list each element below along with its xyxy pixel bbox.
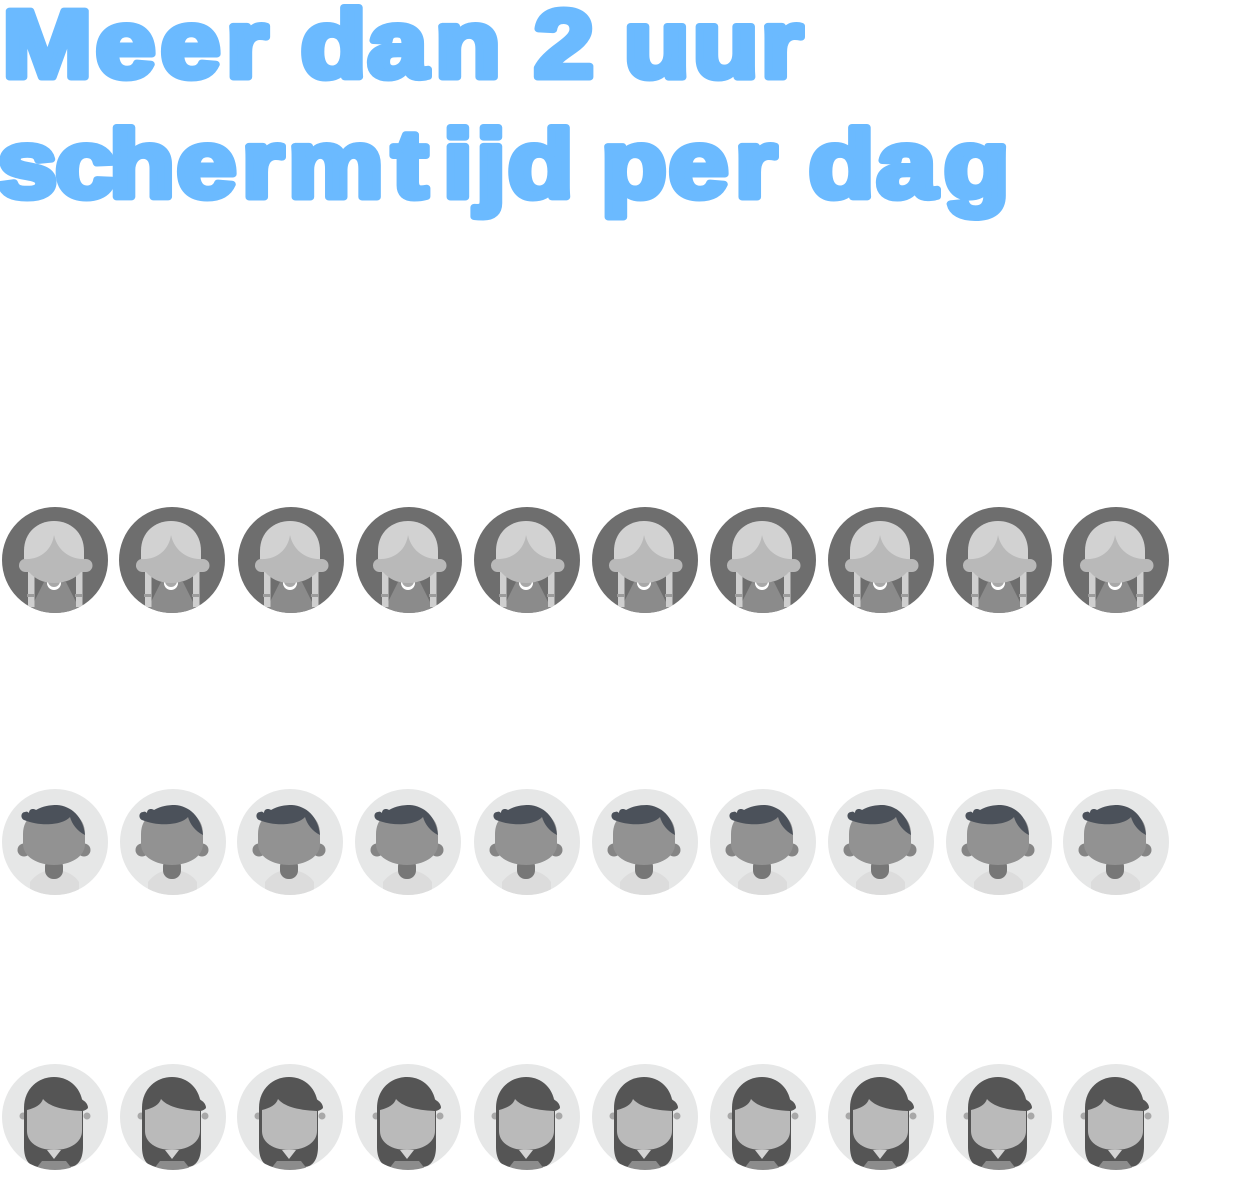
avatar 7 [710,507,816,613]
avatar 6 [592,507,698,613]
avatar 10 [1063,789,1169,895]
avatar 4 [355,789,461,895]
title [0,0,1009,218]
avatar 4 [355,1064,461,1170]
avatar 5 [474,1064,580,1170]
avatar 9 [946,789,1052,895]
avatar 7 [710,789,816,895]
avatar 6 [592,1064,698,1170]
row 1: dark circle girl avatars with braids [2,507,1169,613]
avatar 3 [237,1064,343,1170]
avatar 10 [1063,507,1169,613]
avatar 10 [1063,1064,1169,1170]
avatar 1 [2,507,108,613]
avatar 5 [474,789,580,895]
avatar 3 [237,789,343,895]
row 3: long-haired girl avatars [2,1064,1169,1170]
avatar 2 [120,789,226,895]
avatar 6 [592,789,698,895]
avatar 8 [828,789,934,895]
avatar 1 [2,1064,108,1170]
avatar 9 [946,507,1052,613]
title line 2: schermtijd per dag [0,110,1009,218]
avatar 7 [710,1064,816,1170]
avatar 2 [120,1064,226,1170]
avatar 5 [474,507,580,613]
avatar 4 [356,507,462,613]
row 2: boy avatars [2,789,1169,895]
avatar 3 [238,507,344,613]
avatar 9 [946,1064,1052,1170]
avatar 8 [828,507,934,613]
avatar 8 [828,1064,934,1170]
avatar 1 [2,789,108,895]
avatar 2 [119,507,225,613]
